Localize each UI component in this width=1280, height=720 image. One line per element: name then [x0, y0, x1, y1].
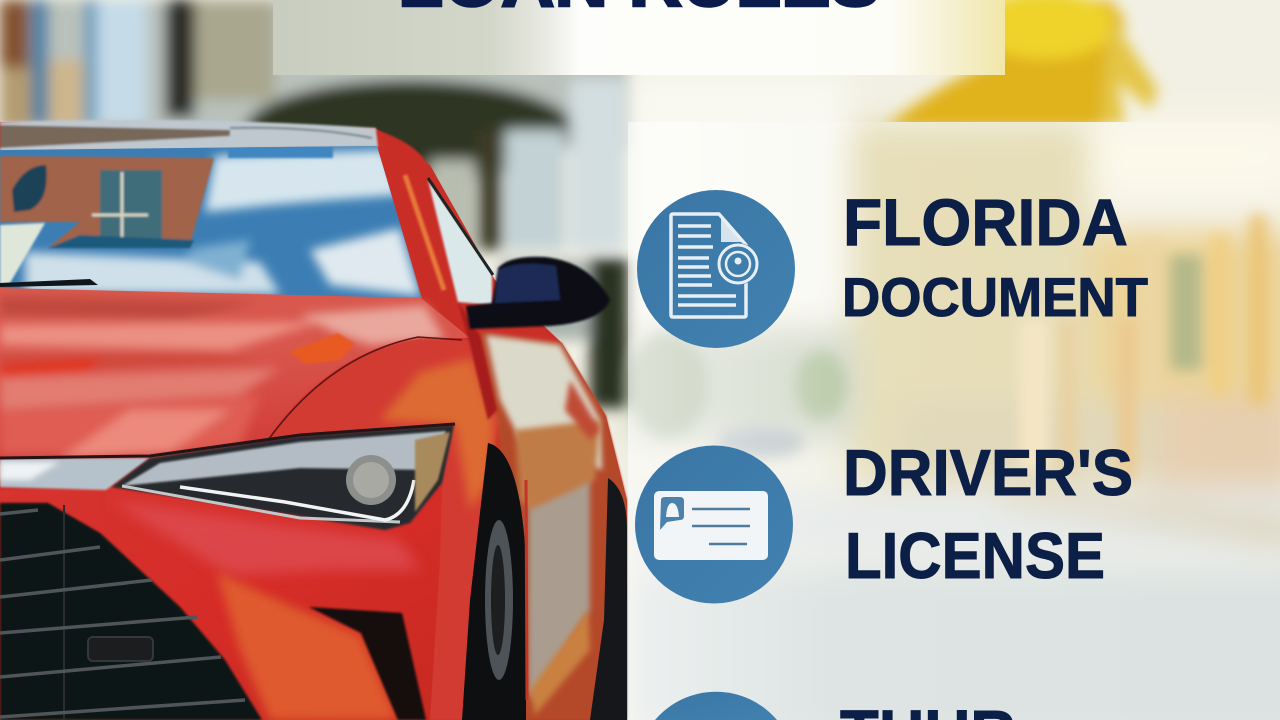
item: Florida document	[637, 185, 1148, 348]
icon: circle cut off	[655, 692, 777, 720]
windshield	[0, 146, 430, 301]
bumper vent	[309, 607, 426, 720]
A-pillar	[376, 129, 428, 298]
hood streaks	[0, 296, 445, 460]
roof band	[0, 120, 378, 152]
car base silhouette	[0, 122, 627, 720]
item: title	[655, 692, 1016, 720]
photo: red car	[0, 120, 627, 720]
hood indicator reflection	[289, 333, 355, 364]
icon: license card	[635, 446, 793, 604]
item: Driver's license	[635, 436, 1133, 604]
rear wheel	[590, 478, 627, 720]
windshield building reflection	[0, 156, 214, 285]
silver strip	[0, 458, 150, 490]
label: Driver's: DRIVER'S	[843, 436, 1133, 509]
label: Florida: FLORIDA	[843, 185, 1128, 259]
bumper orange reflection	[217, 573, 398, 720]
left backdrop	[0, 0, 628, 150]
label: document: DOCUMENT	[842, 266, 1148, 328]
headlight top edge	[0, 424, 455, 458]
fender orange reflection	[380, 358, 494, 510]
door and side panel	[480, 332, 627, 720]
front bumper	[0, 483, 442, 720]
fender	[270, 338, 498, 720]
door edge	[526, 480, 527, 700]
label: license: LICENSE	[845, 519, 1105, 592]
pillar orange stripe	[405, 175, 444, 290]
fender shut line	[268, 337, 462, 440]
palm crown above the panel	[885, 0, 1158, 128]
side mirror	[466, 257, 610, 329]
front wheel	[462, 443, 526, 720]
rear pillar dark	[458, 302, 497, 420]
title panel	[273, 0, 1005, 75]
panel: required documents	[628, 122, 1280, 720]
side window	[428, 180, 492, 305]
bumper light patch	[110, 500, 420, 575]
background: blurred street scene	[0, 0, 1280, 560]
front grille	[0, 503, 262, 720]
headlight	[112, 425, 454, 530]
window edge	[428, 178, 493, 275]
hood	[0, 288, 470, 460]
icon: document with seal	[637, 190, 795, 348]
